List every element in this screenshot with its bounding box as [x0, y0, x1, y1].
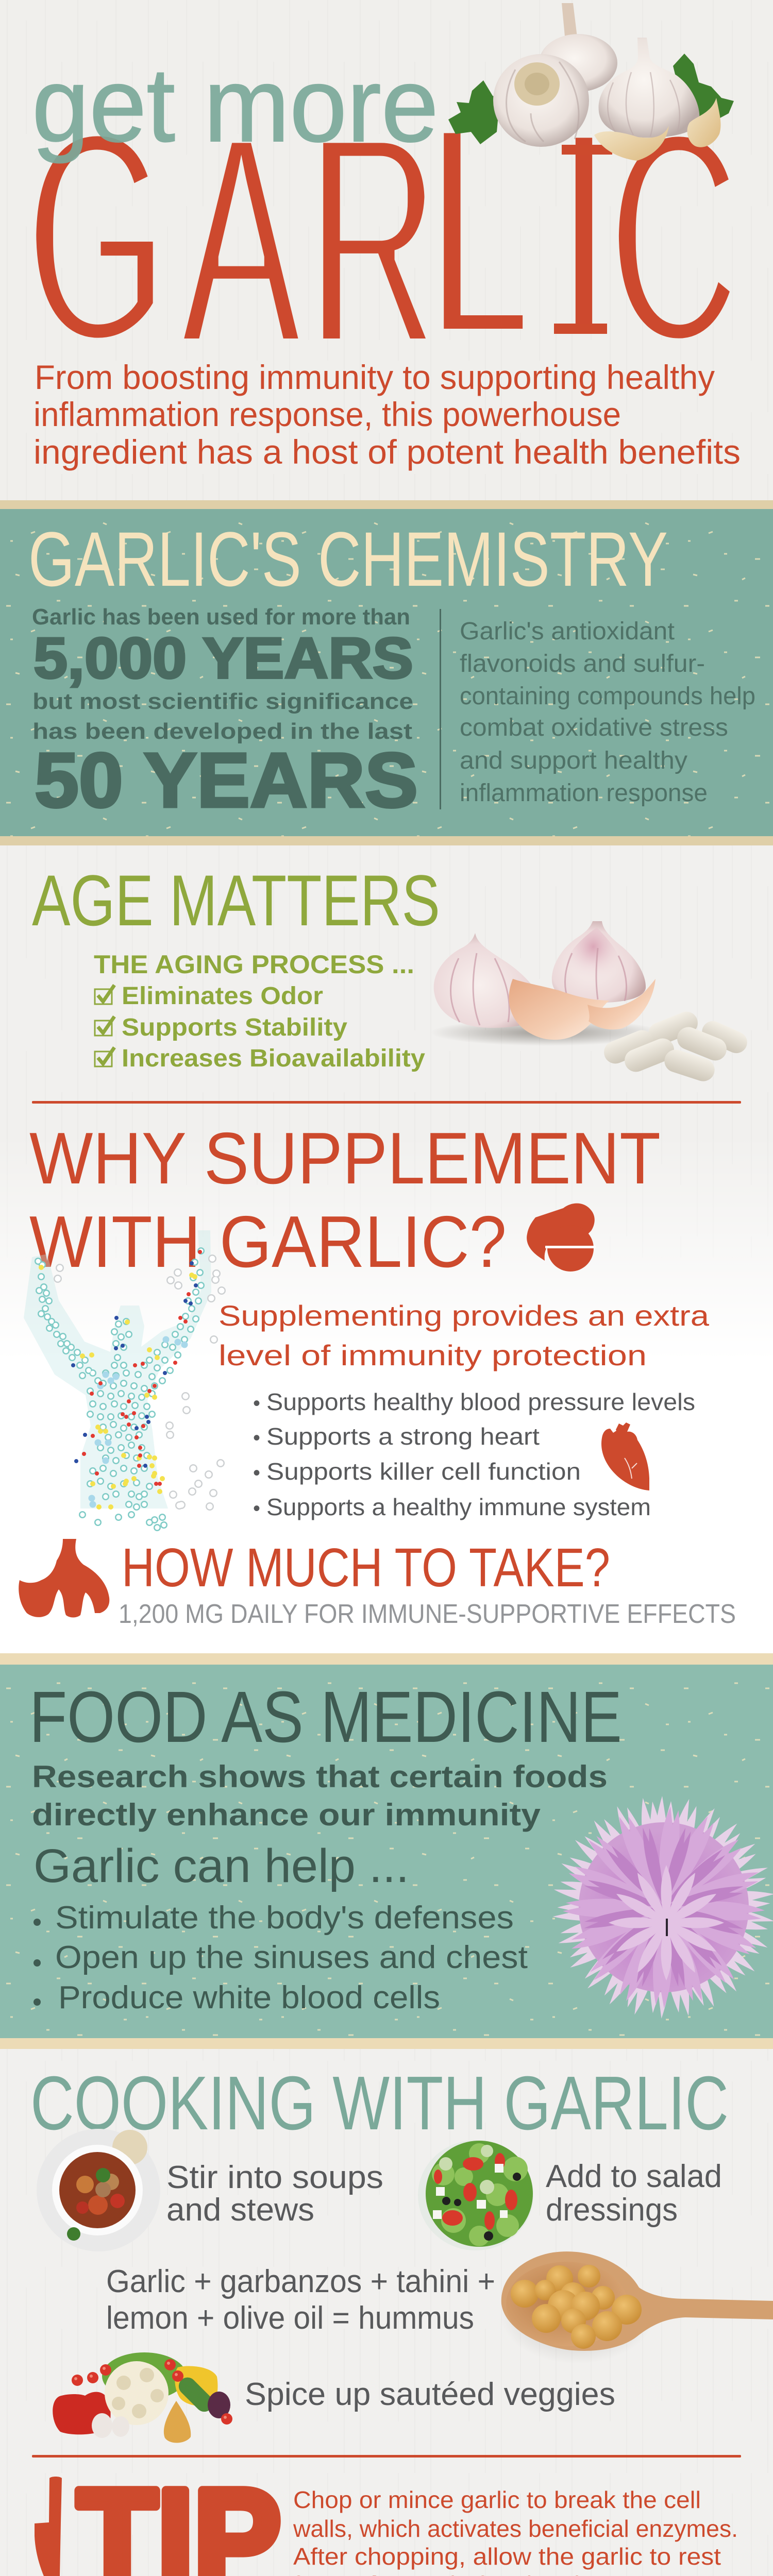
panel: garlic's chemistry — [0, 500, 773, 845]
heading: get more: get more — [32, 46, 439, 164]
heading: why supplement with garlic — [29, 1117, 661, 1283]
intro text: ingredient has a host of potent health benefits — [33, 433, 741, 471]
right column: antioxidant text — [460, 618, 755, 807]
list: supplement benefits: • — [253, 1392, 260, 1415]
intro text — [33, 358, 741, 471]
checklist: the aging process: THE AGING PROCESS ... — [94, 950, 414, 979]
illustration: molecular human figure — [24, 1230, 222, 1528]
panel: tip — [35, 2461, 738, 2576]
list: garlic benefits: Stimulate the body's defenses — [55, 1900, 514, 1936]
right column: antioxidant text: and support healthy — [460, 747, 687, 774]
image: vegetables — [53, 2352, 232, 2443]
heading: age matters: AGE MATTERS — [32, 860, 440, 941]
list: supplement benefits: Supports killer cell function — [266, 1458, 581, 1485]
checklist: the aging process — [94, 950, 425, 1072]
image: pink garlic — [430, 921, 751, 1084]
text: research statement: Research shows that certain foods — [32, 1759, 608, 1794]
molecule dots: red and navy — [84, 1252, 200, 1484]
text: tip body — [293, 2486, 738, 2576]
molecule rings: grey — [58, 1259, 222, 1506]
heading: why supplement with garlic: WITH GARLIC? — [29, 1201, 507, 1283]
list: supplement benefits: • — [253, 1497, 260, 1520]
checklist: the aging process: Supports Stability — [122, 1014, 347, 1041]
text: tip body: After chopping, allow the garlic to rest — [293, 2543, 721, 2570]
text: immunity protection: Supplementing provides an extra — [219, 1299, 710, 1332]
right column: antioxidant text: Garlic's antioxidant — [460, 618, 675, 645]
checklist: the aging process: Increases Bioavailability — [122, 1045, 425, 1072]
intro text: inflammation response, this powerhouse — [33, 395, 621, 433]
image: garlic bulbs with parsley — [448, 3, 734, 161]
text: soups and stews: Stir into soups — [166, 2160, 383, 2195]
panel: header — [27, 3, 741, 471]
right column: antioxidant text: inflammation response — [460, 779, 708, 807]
list: garlic benefits — [33, 1900, 528, 2015]
image: soup bowl — [37, 2129, 160, 2251]
icon: knife — [35, 2477, 62, 2576]
text: salad dressings — [546, 2159, 722, 2228]
icons: check boxes — [95, 985, 114, 1066]
molecule rings: teal — [38, 1251, 201, 1528]
icon: garlic bulb — [19, 1539, 109, 1618]
text: garlic can help: Garlic can help ... — [33, 1840, 409, 1892]
left column: years facts — [32, 604, 418, 823]
text: tip body: Chop or mince garlic to break the cell — [293, 2486, 701, 2513]
list: supplement benefits — [253, 1388, 695, 1520]
checklist: the aging process: Eliminates Odor — [122, 982, 323, 1010]
icon: pills — [527, 1204, 596, 1272]
panel: food as medicine — [0, 1653, 773, 2049]
right column: antioxidant text: combat oxidative stress — [460, 714, 728, 741]
panel: why supplement — [19, 1117, 736, 1629]
image: spoon of chickpeas — [500, 2251, 773, 2364]
text: immunity protection: level of immunity protection — [219, 1339, 647, 1371]
text: research statement — [32, 1759, 608, 1832]
list: supplement benefits: Supports healthy blood pressure levels — [266, 1388, 695, 1415]
text: hummus recipe: lemon + olive oil = hummus — [106, 2300, 474, 2336]
list: garlic benefits: Open up the sinuses and chest — [55, 1940, 528, 1975]
icon: heart — [601, 1422, 649, 1490]
text: sauteed veggies: Spice up sautéed veggies — [245, 2377, 615, 2412]
text: tip body: walls, which activates beneficial enzymes. — [293, 2515, 738, 2542]
left column: years facts: has been developed in the last — [32, 719, 412, 744]
heading: why supplement with garlic: WHY SUPPLEMENT — [29, 1117, 661, 1199]
list: supplement benefits: • — [253, 1427, 260, 1449]
list: supplement benefits: Supports a healthy immune system — [266, 1494, 651, 1520]
left column: years facts: 5,000 YEARS — [33, 626, 413, 690]
image: capsules — [600, 1008, 751, 1084]
text: hummus recipe — [106, 2264, 495, 2336]
left column: years facts: Garlic has been used for more than — [32, 604, 410, 630]
text: salad dressings: dressings — [546, 2192, 678, 2228]
image: salad — [418, 2140, 533, 2250]
heading: GARLIC: GARLIC — [27, 65, 739, 407]
heading: food as medicine: FOOD AS MEDICINE — [29, 1676, 622, 1757]
molecule dots: blue and yellow — [92, 1340, 184, 1504]
panel: cooking with garlic — [30, 2061, 773, 2443]
text: salad dressings: Add to salad — [546, 2159, 722, 2194]
right column: antioxidant text: flavonoids and sulfur- — [460, 650, 705, 677]
intro text: From boosting immunity to supporting healthy — [35, 358, 715, 396]
text: research statement: directly enhance our immunity — [32, 1798, 541, 1832]
list: supplement benefits: Supports a strong heart — [266, 1423, 540, 1450]
text: soups and stews: and stews — [166, 2192, 314, 2228]
heading: how much to take: HOW MUCH TO TAKE? — [122, 1537, 610, 1598]
image: chive flower — [552, 1796, 773, 2019]
text: soups and stews — [166, 2160, 383, 2228]
list: garlic benefits: Produce white blood cells — [58, 1980, 440, 2015]
left column: years facts: but most scientific significance — [32, 689, 413, 714]
panel: age matters — [32, 860, 751, 1084]
right column: antioxidant text: containing compounds help — [460, 683, 755, 710]
list: supplement benefits: • — [253, 1462, 260, 1484]
text: immunity protection — [219, 1299, 710, 1371]
left column: years facts: 50 YEARS — [35, 737, 418, 823]
text: hummus recipe: Garlic + garbanzos + tahini + — [106, 2264, 495, 2299]
